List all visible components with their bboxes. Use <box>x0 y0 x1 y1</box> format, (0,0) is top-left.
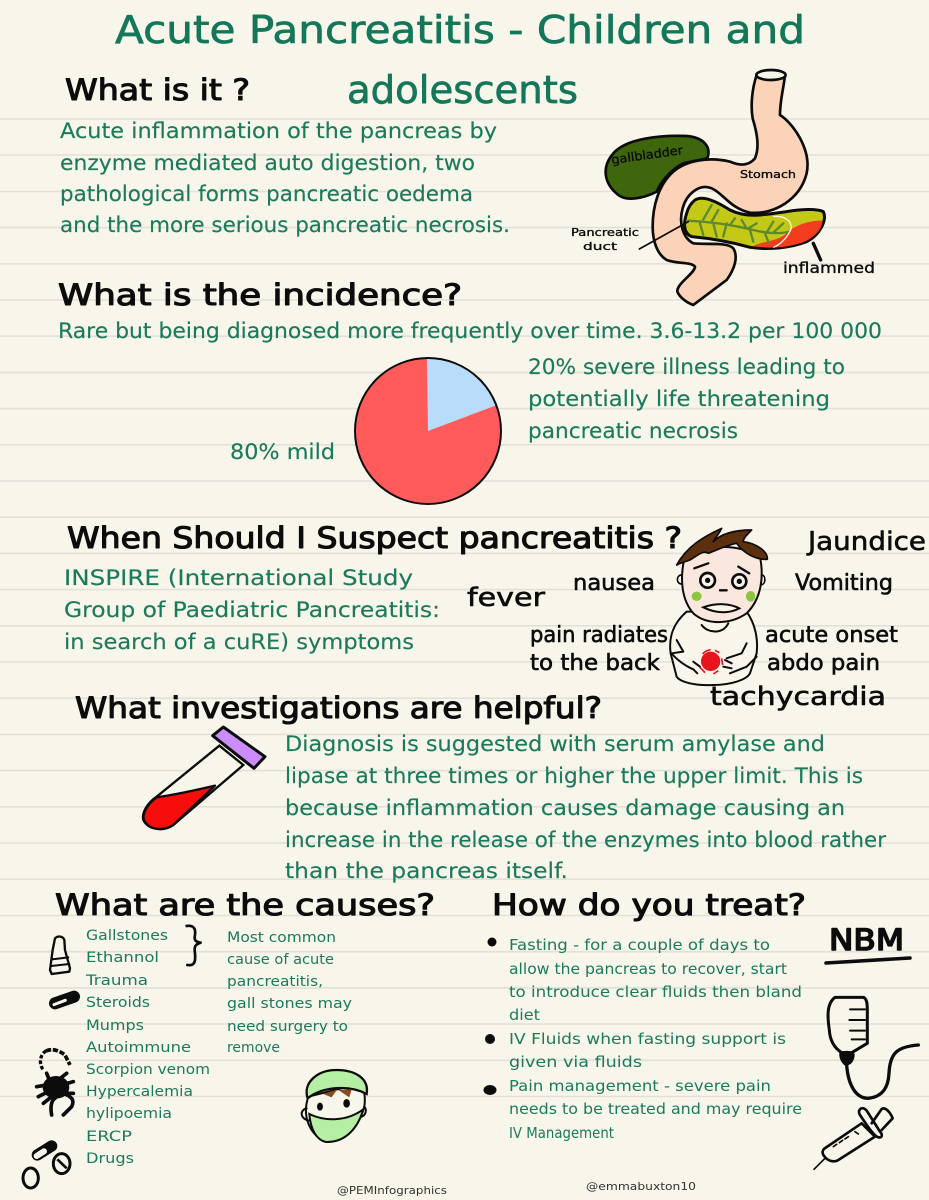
treatment list: IV Management <box>509 1124 614 1142</box>
symptoms: Jaundice <box>806 527 926 557</box>
text: diagnosis: increase in the release of the enzymes into blood rather <box>285 828 886 852</box>
symptoms: to the back <box>530 651 660 676</box>
label: mild share: 80% mild <box>230 440 335 464</box>
causes list: Autoimmune <box>86 1040 191 1056</box>
heading: causes: What are the causes? <box>55 888 435 922</box>
causes list: hylipoemia <box>86 1106 172 1122</box>
label: stomach: Stomach <box>740 168 796 181</box>
treatment list: to introduce clear fluids then bland <box>509 983 802 1001</box>
text: diagnosis: lipase at three times or higher the upper limit. This is <box>285 764 863 788</box>
bracket <box>187 926 201 965</box>
tube <box>847 1045 918 1098</box>
causes list: ERCP <box>86 1129 132 1145</box>
body <box>670 612 757 685</box>
heading: incidence: What is the incidence? <box>58 278 462 312</box>
panel: incidence <box>58 278 882 504</box>
bag scale <box>849 1009 865 1039</box>
gallbladder <box>606 136 708 199</box>
panel: treatment <box>484 888 918 1169</box>
causes list: Ethannol <box>86 950 159 966</box>
text: incidence: Rare but being diagnosed more frequently over time. 3.6-13.2 per 100 000 <box>58 319 882 343</box>
pain spot <box>701 652 720 671</box>
icon: IV fluid bag and syringe <box>814 997 918 1169</box>
pill highlight <box>54 1000 65 1005</box>
text: most common cause: gall stones may <box>227 996 352 1012</box>
neck <box>702 623 728 632</box>
text: diagnosis: because inflammation causes damage causing an <box>285 796 845 820</box>
bottle bands <box>51 957 69 966</box>
illustration: unwell child <box>670 528 767 685</box>
heading: treatment: How do you treat? <box>492 888 806 922</box>
icon: blood test tube <box>143 727 265 829</box>
treatment list: diet <box>509 1006 540 1024</box>
text: diagnosis: Diagnosis is suggested with serum amylase and <box>285 732 825 756</box>
pointer line: inflamed <box>813 243 821 260</box>
causes list: Mumps <box>86 1018 144 1034</box>
hair <box>677 528 767 565</box>
causes list: Trauma <box>85 973 148 989</box>
icon: surgeon <box>302 1070 367 1142</box>
symptoms: tachycardia <box>710 682 886 712</box>
ears <box>677 575 765 585</box>
text: diagnosis <box>285 732 886 883</box>
symptoms: abdo pain <box>767 651 880 676</box>
causes list: Scorpion venom <box>86 1062 210 1078</box>
panel: causes <box>23 888 435 1188</box>
symptoms <box>467 527 926 712</box>
eyes <box>700 573 715 588</box>
title <box>115 8 805 112</box>
treatment list: needs to be treated and may require <box>509 1100 802 1118</box>
causes list: Gallstones <box>86 928 168 944</box>
heading: investigations: What investigations are helpful? <box>75 691 602 725</box>
heading: what is it: What is it ? <box>65 73 250 107</box>
inflamed boundary <box>773 216 791 247</box>
label: NBM <box>826 923 910 963</box>
icon: pill <box>55 997 74 1003</box>
green cheeks <box>692 592 702 601</box>
treatment list: allow the pancreas to recover, start <box>509 960 787 978</box>
label: severe share: pancreatic necrosis <box>528 419 738 443</box>
causes list: Drugs <box>86 1151 134 1167</box>
text: inspire: Group of Paediatric Pancreatitis: <box>64 598 440 622</box>
icon: tablets <box>23 1154 70 1188</box>
panel: when to suspect <box>64 521 926 712</box>
stomach opening <box>756 70 786 80</box>
icon: scorpion <box>37 1050 73 1115</box>
pointer line: duct <box>639 222 688 249</box>
stomach and duodenum <box>653 75 807 305</box>
pancreas <box>685 198 824 249</box>
text: diagnosis: than the pancreas itself. <box>285 859 568 883</box>
bag port <box>839 1051 855 1066</box>
pancreatic duct <box>688 205 790 242</box>
title: Acute Pancreatitis - Children and <box>115 8 805 52</box>
label: pancreatic duct: duct <box>583 240 618 253</box>
icons: causes column <box>23 926 367 1188</box>
symptoms: Vomiting <box>795 571 893 596</box>
pie chart <box>355 358 501 504</box>
panel: investigations <box>75 691 886 883</box>
causes list: Hypercalemia <box>86 1084 193 1100</box>
illustration: stomach and pancreas <box>606 70 824 305</box>
label: pancreatic duct: Pancreatic <box>571 226 639 239</box>
text: most common cause: remove <box>227 1040 280 1056</box>
text: most common cause: Most common <box>227 930 336 946</box>
text: definition: enzyme mediated auto digestion, two <box>60 151 475 175</box>
label: pancreatic duct <box>571 226 639 253</box>
text: inspire: in search of a cuRE) symptoms <box>64 630 414 654</box>
icon: bottle <box>50 937 70 974</box>
text: most common cause: need surgery to <box>227 1019 348 1035</box>
panel: what is it <box>60 73 510 237</box>
label: severe share: potentially life threatening <box>528 387 830 411</box>
text: most common cause <box>227 930 352 1056</box>
text: most common cause: pancreatitis, <box>227 974 323 990</box>
treatment list: Fasting - for a couple of days to <box>509 936 770 954</box>
bullets <box>484 938 496 1095</box>
label: gallbladder: gallbladder <box>610 143 684 167</box>
brows and nose <box>694 563 749 590</box>
symptoms: nausea <box>573 571 655 596</box>
title: adolescents <box>347 68 578 112</box>
credit: emmabuxton10: @emmabuxton10 <box>586 1180 696 1193</box>
treatment list <box>509 936 802 1142</box>
mouth <box>703 604 739 612</box>
arms and hands <box>672 640 757 673</box>
IV bag <box>828 997 867 1053</box>
text: most common cause: cause of acute <box>227 952 334 968</box>
text: definition: and the more serious pancreatic necrosis. <box>60 213 510 237</box>
text: definition: pathological forms pancreatic oedema <box>60 182 473 206</box>
label: inflammed: inflammed <box>783 259 875 277</box>
heading: suspect: When Should I Suspect pancreatitis ? <box>67 521 682 555</box>
pain rings <box>700 650 723 674</box>
causes list <box>85 928 210 1167</box>
treatment list: Pain management - severe pain <box>509 1077 771 1095</box>
label: NBM: NBM <box>829 923 904 957</box>
inflamed area <box>753 221 823 248</box>
symptoms: fever <box>467 583 545 613</box>
label: severe share: 20% severe illness leading to <box>528 355 845 379</box>
symptoms: pain radiates <box>530 623 668 648</box>
text: definition: Acute inflammation of the pancreas by <box>60 119 497 143</box>
syringe <box>814 1108 893 1169</box>
text: inspire <box>64 566 440 654</box>
icon: capsule <box>37 1146 52 1156</box>
credit: PEMInfographics: @PEMInfographics <box>337 1184 447 1197</box>
head <box>682 547 762 622</box>
symptoms: acute onset <box>765 623 898 648</box>
label: severe share <box>528 355 845 443</box>
treatment list: IV Fluids when fasting support is <box>509 1030 786 1048</box>
treatment list: given via fluids <box>509 1053 642 1071</box>
text: definition <box>60 119 510 237</box>
text: inspire: INSPIRE (International Study <box>64 566 413 590</box>
causes list: Steroids <box>86 995 150 1011</box>
